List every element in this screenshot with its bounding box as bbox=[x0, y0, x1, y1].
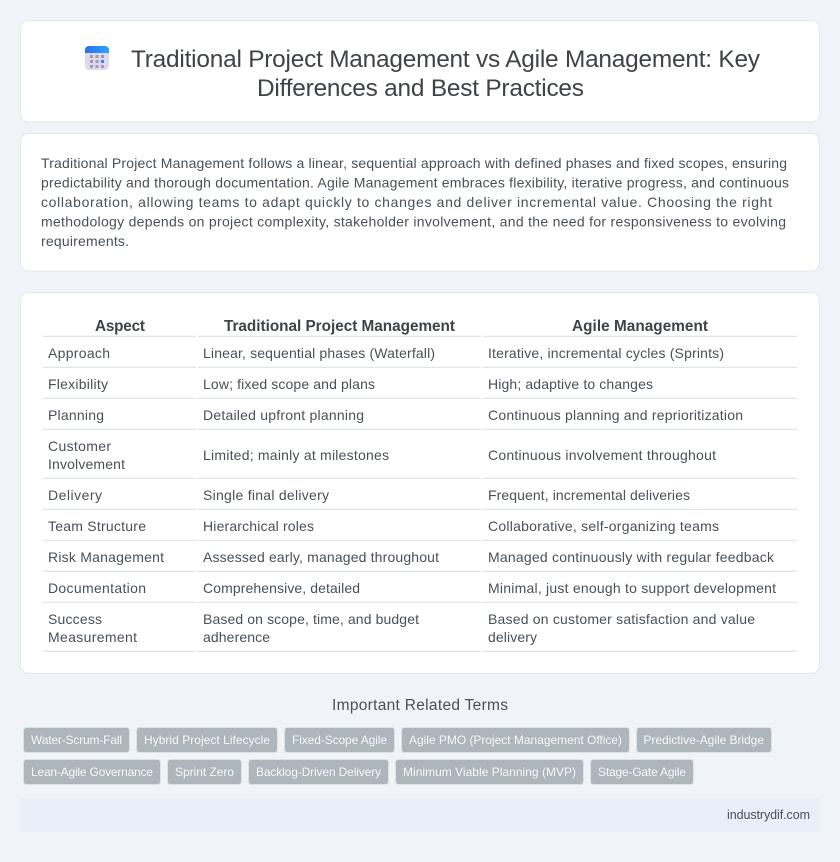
table row: customer involvement: Continuous involvement throughout bbox=[488, 447, 716, 463]
table row: delivery: Frequent, incremental deliveries bbox=[488, 487, 690, 503]
footer: industrydif.com bbox=[727, 808, 810, 822]
table row: team structure: Collaborative, self-organizing teams bbox=[488, 518, 719, 534]
tag bbox=[24, 760, 160, 784]
table row: success measurement: Based on scope, time, and budget bbox=[203, 611, 419, 627]
panel: comparison table bbox=[20, 292, 820, 674]
table row: planning bbox=[43, 407, 797, 429]
text block: introduction paragraph: collaboration, allowing teams to adapt quickly to changes and deliver incremental value. Choosing the right bbox=[41, 194, 772, 210]
tag: Sprint Zero bbox=[175, 765, 234, 779]
table header: Traditional Project Management bbox=[224, 318, 455, 335]
heading: title: Traditional Project Management vs Agile Management: Key bbox=[131, 46, 761, 73]
table row: team structure bbox=[43, 518, 797, 540]
table row: documentation: Minimal, just enough to support development bbox=[488, 580, 776, 596]
table row: delivery: Single final delivery bbox=[203, 487, 329, 503]
table row: flexibility: Low; fixed scope and plans bbox=[203, 376, 375, 392]
table row: customer involvement bbox=[43, 438, 797, 478]
table row: delivery: Delivery bbox=[48, 487, 102, 503]
tags: related terms bbox=[24, 728, 772, 784]
table row: risk management: Assessed early, managed throughout bbox=[203, 549, 439, 565]
table row: success measurement bbox=[43, 611, 797, 651]
table row: documentation bbox=[43, 580, 797, 602]
tag bbox=[402, 728, 630, 752]
table row: approach: Approach bbox=[48, 345, 110, 361]
table row: planning: Planning bbox=[48, 407, 104, 423]
tag: Lean-Agile Governance bbox=[31, 765, 153, 779]
table row: customer involvement: Customer bbox=[48, 438, 111, 454]
tag: Backlog-Driven Delivery bbox=[256, 765, 381, 779]
text block: introduction paragraph: methodology depends on project complexity, stakeholder involvement, and the need for responsiveness to evolving bbox=[41, 214, 786, 230]
table row: approach bbox=[43, 345, 797, 367]
tag bbox=[590, 760, 694, 784]
tag bbox=[636, 728, 772, 752]
table row: customer involvement: Involvement bbox=[48, 456, 125, 472]
tag: Hybrid Project Lifecycle bbox=[144, 733, 270, 747]
text block: introduction paragraph: Traditional Project Management follows a linear, sequential approach with defined phases and fixed scopes, ensuring bbox=[41, 155, 787, 171]
heading: title bbox=[131, 46, 761, 102]
table row: success measurement: Measurement bbox=[48, 629, 137, 645]
text block: introduction paragraph: requirements. bbox=[41, 233, 129, 249]
tag: Water-Scrum-Fall bbox=[31, 733, 122, 747]
tag: Stage-Gate Agile bbox=[598, 765, 686, 779]
tag bbox=[168, 760, 242, 784]
heading: important related terms: Important Related Terms bbox=[332, 697, 508, 714]
panel: introduction bbox=[20, 134, 820, 271]
footer bbox=[20, 798, 820, 832]
table row: success measurement: Based on customer satisfaction and value bbox=[488, 611, 755, 627]
table header: Agile Management bbox=[572, 318, 708, 335]
table row: documentation: Documentation bbox=[48, 580, 146, 596]
tag bbox=[396, 760, 584, 784]
table row: risk management bbox=[43, 549, 797, 571]
tag: Minimum Viable Planning (MVP) bbox=[403, 765, 576, 779]
table row: flexibility: High; adaptive to changes bbox=[488, 376, 653, 392]
tag bbox=[24, 728, 130, 752]
tag: Agile PMO (Project Management Office) bbox=[409, 733, 622, 747]
panel: title header bbox=[20, 20, 820, 122]
table row: success measurement: adherence bbox=[203, 629, 270, 645]
table header: Aspect bbox=[95, 318, 145, 335]
table row: documentation: Comprehensive, detailed bbox=[203, 580, 360, 596]
table row: team structure: Team Structure bbox=[48, 518, 146, 534]
tag bbox=[136, 728, 278, 752]
table row: approach: Iterative, incremental cycles (Sprints) bbox=[488, 345, 724, 361]
tag: Fixed-Scope Agile bbox=[292, 733, 387, 747]
tag: Predictive-Agile Bridge bbox=[644, 733, 764, 747]
text block: introduction paragraph bbox=[41, 155, 789, 249]
table row: approach: Linear, sequential phases (Waterfall) bbox=[203, 345, 435, 361]
table row: flexibility bbox=[43, 376, 797, 398]
tag bbox=[284, 728, 394, 752]
table header bbox=[43, 318, 797, 336]
text block: introduction paragraph: predictability and thorough documentation. Agile Management embraces flexibility, iterative progress, and continuous bbox=[41, 174, 789, 190]
table row: planning: Detailed upfront planning bbox=[203, 407, 364, 423]
table row: customer involvement: Limited; mainly at milestones bbox=[203, 447, 389, 463]
heading: title: Differences and Best Practices bbox=[257, 75, 584, 102]
table row: risk management: Risk Management bbox=[48, 549, 164, 565]
table row: team structure: Hierarchical roles bbox=[203, 518, 314, 534]
icon: calendar bbox=[85, 46, 109, 70]
table row: success measurement: Success bbox=[48, 611, 102, 627]
table row: risk management: Managed continuously with regular feedback bbox=[488, 549, 775, 565]
table row: success measurement: delivery bbox=[488, 629, 537, 645]
table row: planning: Continuous planning and reprioritization bbox=[488, 407, 743, 423]
tag bbox=[248, 760, 388, 784]
table row: delivery bbox=[43, 487, 797, 509]
table row: flexibility: Flexibility bbox=[48, 376, 108, 392]
